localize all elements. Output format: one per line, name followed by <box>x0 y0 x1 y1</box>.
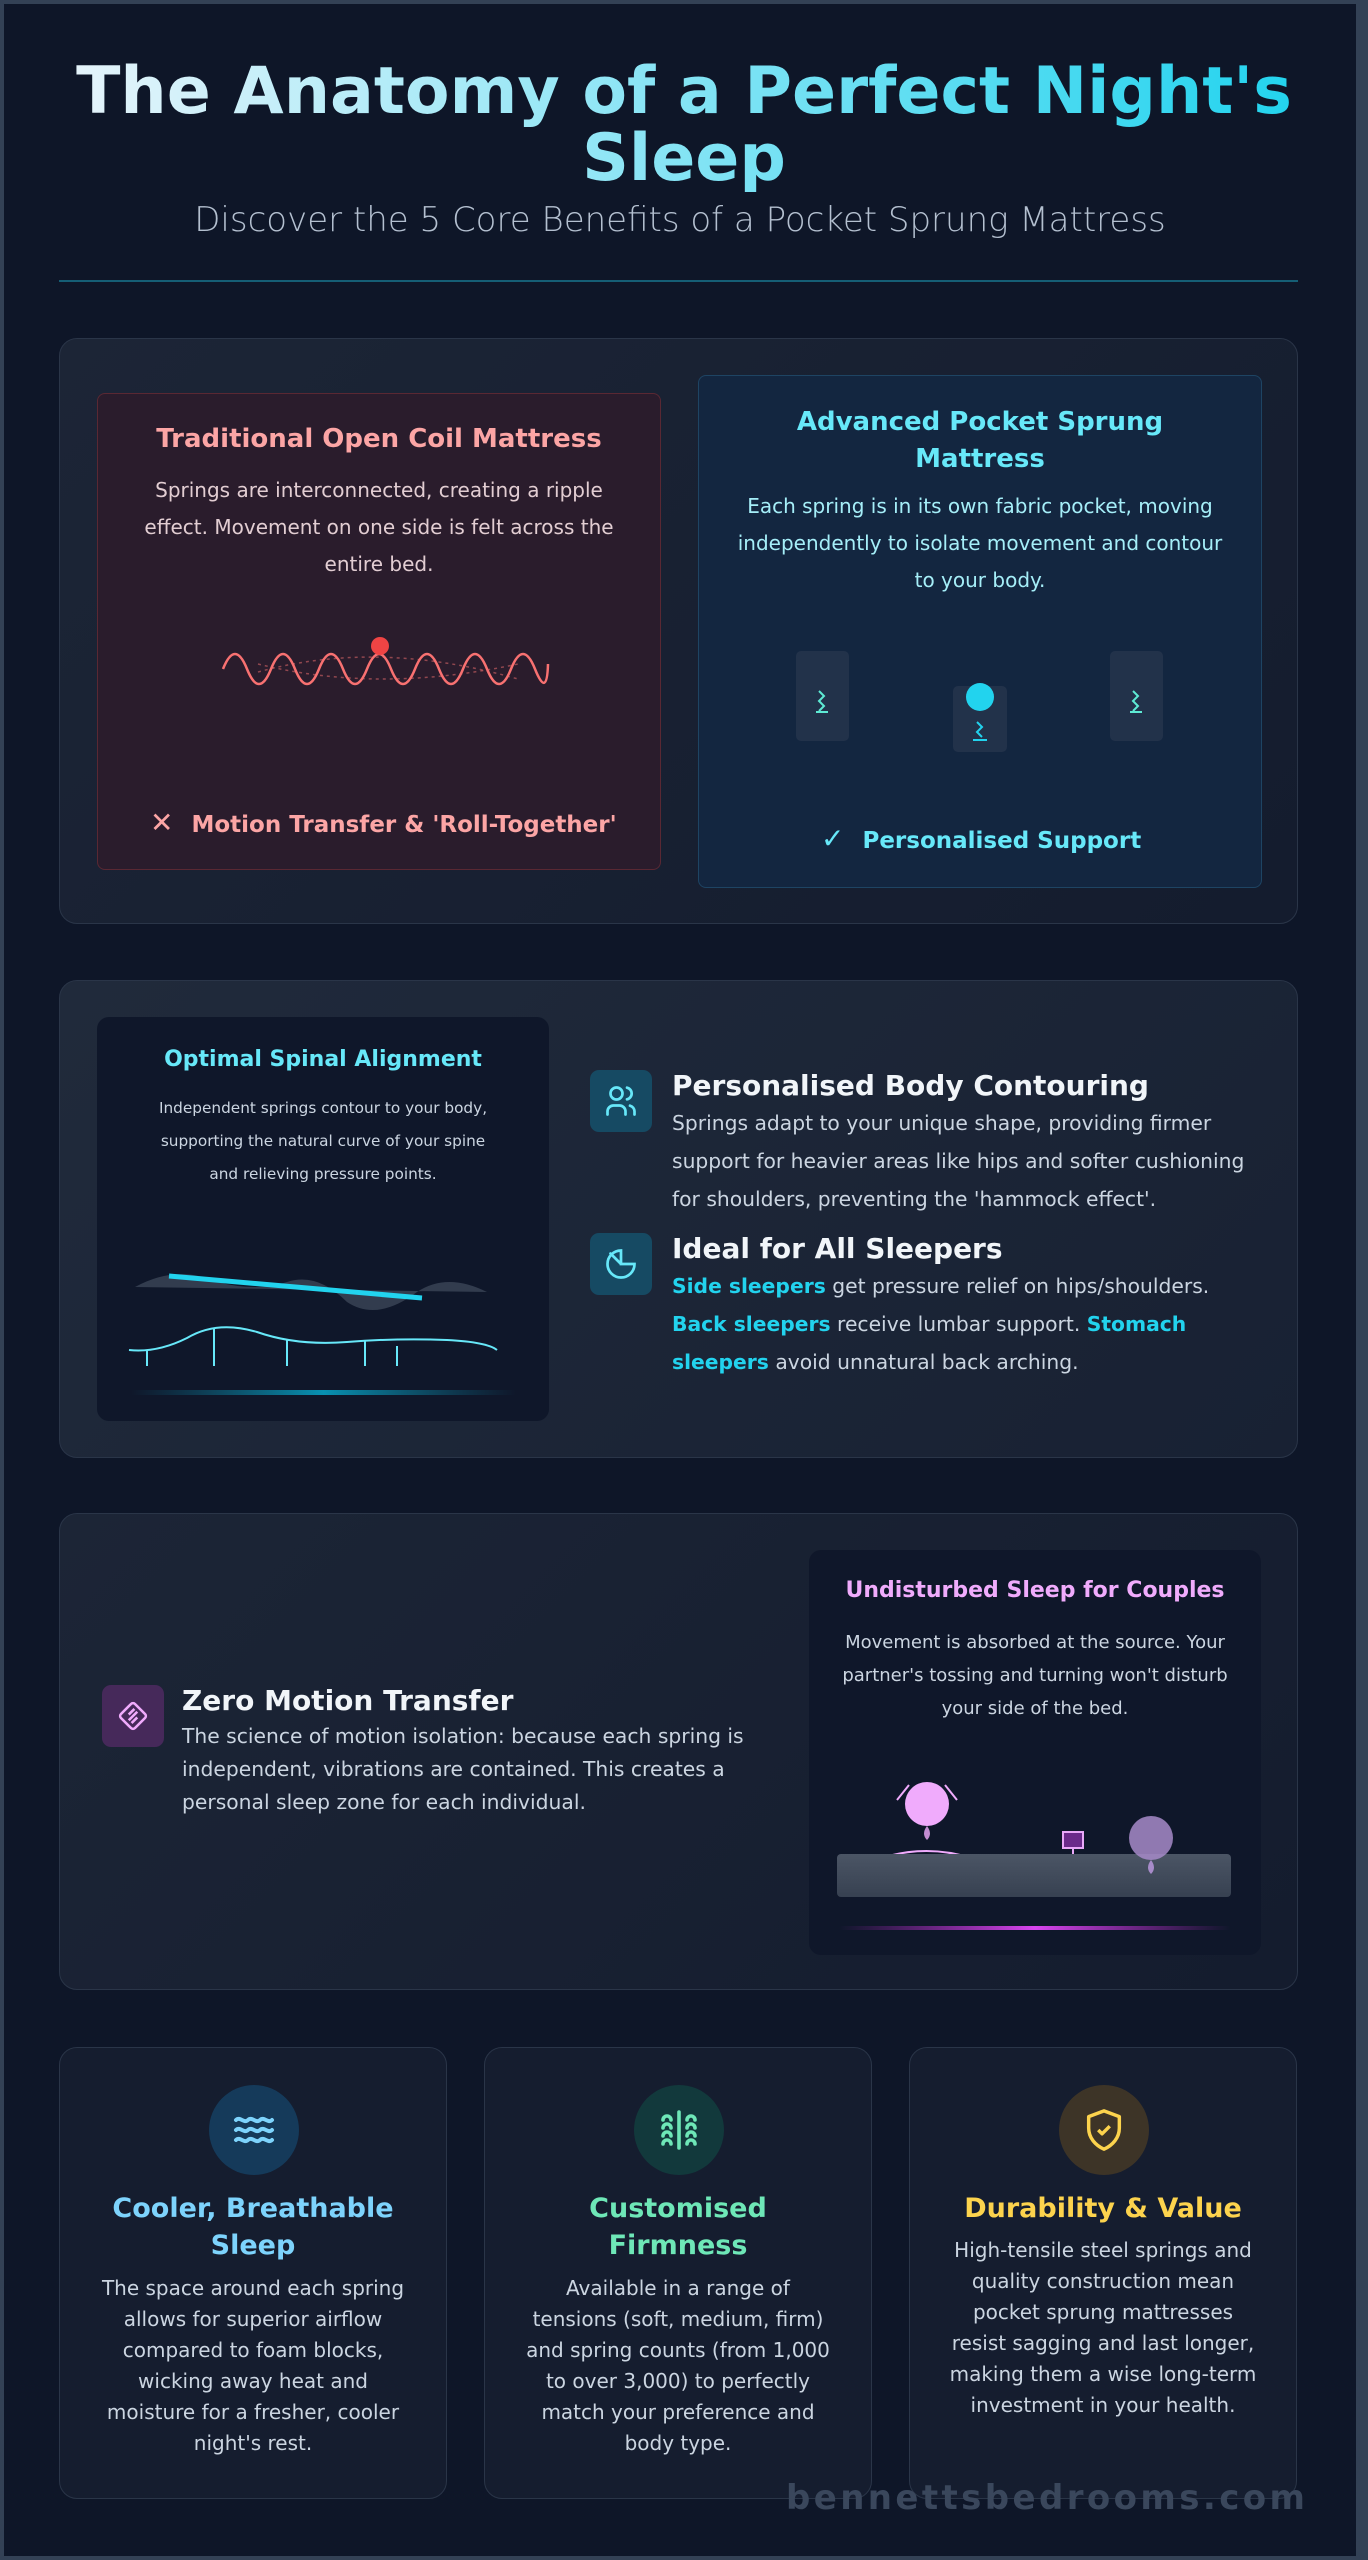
heading <box>797 407 1163 474</box>
card: cooler breathable sleep <box>59 2047 447 2499</box>
heading: Cooler, Breathable <box>112 2193 394 2224</box>
panel: zero motion transfer <box>59 1513 1298 1990</box>
heading: Optimal Spinal Alignment <box>164 1047 482 1072</box>
illustration: pocket springs <box>796 651 1163 752</box>
text: Each spring is in its own fabric pocket, moving <box>747 494 1213 518</box>
item: zero motion transfer: independent, vibrations are contained. This creates a <box>182 1757 725 1781</box>
text <box>842 1632 1228 1719</box>
text: and relieving pressure points. <box>209 1165 437 1183</box>
card: pocket sprung <box>698 375 1262 888</box>
text: night's rest. <box>194 2431 312 2455</box>
text: The space around each spring <box>102 2276 404 2300</box>
item: ideal for all sleepers <box>672 1232 1209 1374</box>
item: personalised body contouring: Springs adapt to your unique shape, providing firmer <box>672 1111 1211 1135</box>
text: quality construction mean <box>972 2269 1234 2293</box>
card: optimal spinal alignment <box>97 1017 549 1421</box>
text <box>950 2238 1256 2417</box>
badge: personalised support: ✓ Personalised Support <box>821 822 1141 855</box>
heading: Durability & Value <box>964 2193 1242 2224</box>
text <box>526 2276 830 2455</box>
text: resist sagging and last longer, <box>952 2331 1254 2355</box>
text: investment in your health. <box>971 2393 1235 2417</box>
text: wicking away heat and <box>138 2369 368 2393</box>
text: High-tensile steel springs and <box>954 2238 1252 2262</box>
text: partner's tossing and turning won't disturb <box>842 1665 1228 1686</box>
text: independently to isolate movement and contour <box>738 531 1222 555</box>
item: personalised body contouring: support for heavier areas like hips and softer cushioning <box>672 1149 1244 1173</box>
watermark: bennettsbedrooms.com <box>786 2478 1308 2518</box>
text: allows for superior airflow <box>124 2307 382 2331</box>
heading: Mattress <box>915 444 1045 474</box>
panel: comparison <box>59 338 1298 924</box>
text: moisture for a fresher, cooler <box>107 2400 399 2424</box>
text <box>144 478 614 576</box>
heading: Undisturbed Sleep for Couples <box>845 1578 1225 1603</box>
text: Available in a range of <box>566 2276 790 2300</box>
text: pocket sprung mattresses <box>973 2300 1233 2324</box>
text <box>102 2276 404 2455</box>
text: Independent springs contour to your body, <box>159 1099 487 1117</box>
card: traditional open coil <box>97 393 661 870</box>
text: body type. <box>625 2431 731 2455</box>
panel: spinal alignment <box>59 980 1298 1458</box>
item: zero motion transfer: Zero Motion Transfer <box>182 1684 513 1717</box>
icon: shield <box>1059 2085 1149 2175</box>
badge: motion transfer: ✕ Motion Transfer & 'Roll-Together' <box>150 806 617 839</box>
text: supporting the natural curve of your spine <box>161 1132 485 1150</box>
illustration: couple in bed <box>837 1782 1231 1930</box>
icon: springs <box>634 2085 724 2175</box>
icon: all sleepers <box>590 1233 652 1295</box>
heading: Customised <box>589 2193 767 2224</box>
heading: Sleep <box>211 2230 295 2261</box>
heading <box>589 2193 767 2261</box>
heading <box>112 2193 394 2261</box>
icon: body contouring <box>590 1070 652 1132</box>
text: Movement is absorbed at the source. Your <box>845 1632 1225 1653</box>
title <box>0 58 1368 192</box>
text <box>738 494 1222 592</box>
illustration: coil ripple <box>222 637 550 686</box>
item: personalised body contouring: Personalised Body Contouring <box>672 1069 1149 1102</box>
text: to over 3,000) to perfectly <box>546 2369 810 2393</box>
title: The Anatomy of a Perfect Night's <box>76 54 1292 129</box>
heading: Traditional Open Coil Mattress <box>156 424 602 454</box>
text: entire bed. <box>325 552 433 576</box>
text: Springs are interconnected, creating a ripple <box>155 478 603 502</box>
heading: Firmness <box>609 2230 747 2261</box>
item: personalised body contouring: for shoulders, preventing the 'hammock effect'. <box>672 1187 1156 1211</box>
item: ideal for all sleepers: sleepers avoid unnatural back arching. <box>672 1350 1079 1374</box>
text: your side of the bed. <box>942 1698 1128 1719</box>
item: zero motion transfer: The science of motion isolation: because each spring is <box>182 1724 744 1748</box>
text: and spring counts (from 1,000 <box>526 2338 830 2362</box>
item: zero motion transfer <box>182 1684 744 1814</box>
text: match your preference and <box>541 2400 815 2424</box>
subtitle: Discover the 5 Core Benefits of a Pocket Sprung Mattress <box>194 200 1166 240</box>
item: ideal for all sleepers: Back sleepers receive lumbar support. Stomach <box>672 1312 1186 1336</box>
text <box>159 1099 487 1183</box>
text: tensions (soft, medium, firm) <box>533 2307 823 2331</box>
illustration: spine on springs <box>128 1274 501 1395</box>
icon: motion isolation <box>102 1685 164 1747</box>
text: effect. Movement on one side is felt across the <box>144 515 614 539</box>
item: zero motion transfer: personal sleep zone for each individual. <box>182 1790 586 1814</box>
item: ideal for all sleepers: Side sleepers get pressure relief on hips/shoulders. <box>672 1274 1209 1298</box>
text: making them a wise long-term <box>950 2362 1256 2386</box>
item: personalised body contouring <box>672 1069 1244 1211</box>
card: customised firmness <box>484 2047 872 2499</box>
card: couples <box>809 1550 1261 1955</box>
heading: Advanced Pocket Sprung <box>797 407 1163 437</box>
card: durability & value <box>909 2047 1297 2499</box>
text: to your body. <box>915 568 1045 592</box>
item: ideal for all sleepers: Ideal for All Sleepers <box>672 1232 1003 1265</box>
title: Sleep <box>582 121 786 196</box>
text: compared to foam blocks, <box>123 2338 383 2362</box>
icon: airflow <box>209 2085 299 2175</box>
